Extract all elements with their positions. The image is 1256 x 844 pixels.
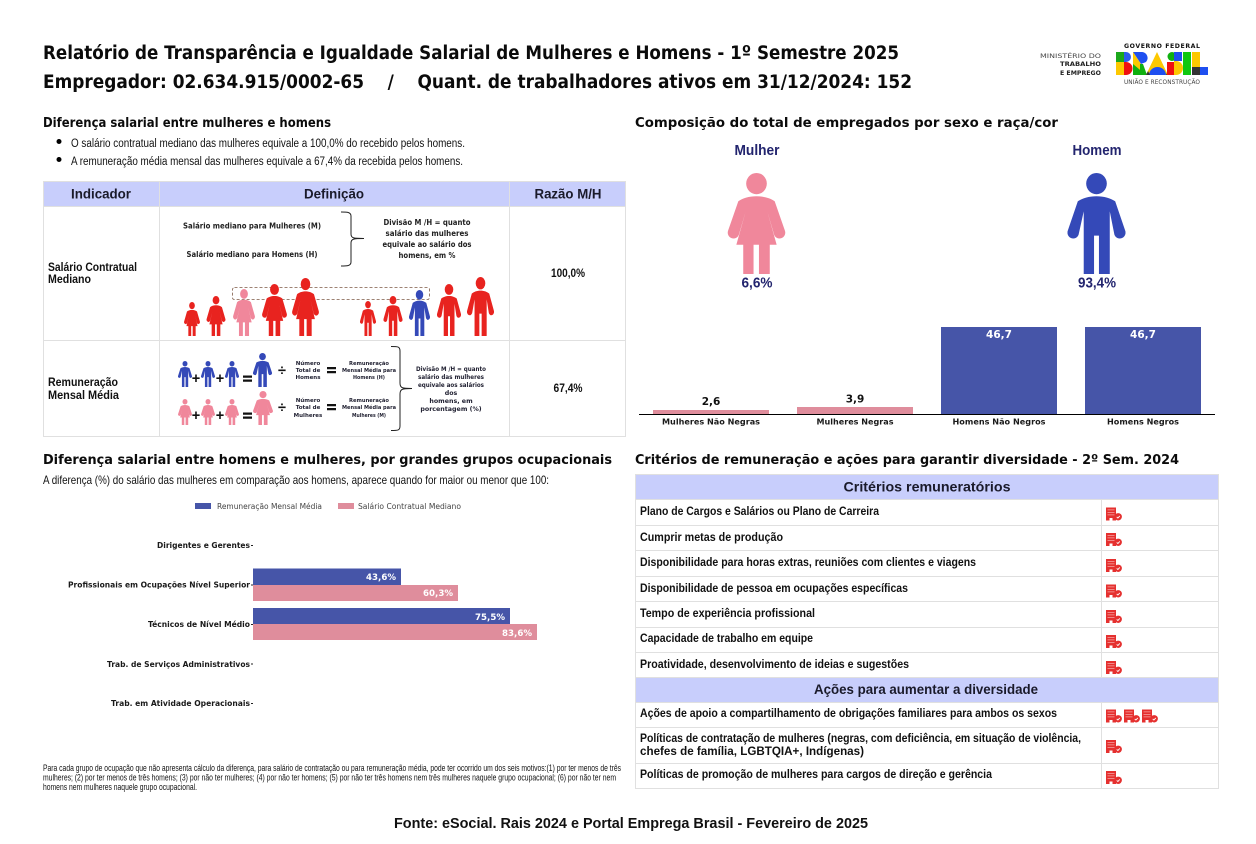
criteria table: Políticas de promoção de mulheres para cargos de direção e gerência — [640, 769, 993, 781]
criteria table: chefes de família, LGBTQIA+, Indígenas) — [640, 746, 864, 758]
criteria table: Capacidade de trabalho em equipe — [640, 633, 813, 645]
criteria table: Tempo de experiência profissional — [640, 608, 815, 620]
legend — [195, 501, 461, 511]
indicator table: Indicador — [71, 186, 132, 202]
criteria table: Critérios remuneratórios — [844, 480, 1010, 494]
icons: building with check marks — [1106, 508, 1158, 784]
panel: critérios de remuneração e ações — [635, 452, 1219, 789]
legend: Remuneração Mensal Média — [217, 501, 322, 511]
icons: men by salary order — [360, 277, 494, 336]
row: remuneração mensal média: Mensal Média para — [342, 404, 396, 411]
row: remuneração mensal média: Total de — [296, 368, 321, 374]
horizontal bar chart: 43,6% — [366, 573, 396, 583]
row: remuneração mensal média: porcentagem (%) — [420, 406, 482, 413]
bullet list — [56, 138, 465, 168]
row: remuneração mensal média: + — [216, 371, 224, 387]
bullet list: O salário contratual mediano das mulheres equivale a 100,0% do recebido pelos homens. — [71, 138, 465, 150]
label: homem: Homem — [1072, 142, 1122, 159]
row: remuneração mensal média: + — [216, 408, 224, 424]
row: remuneração mensal média: ÷ — [278, 400, 286, 416]
value: homens 93,4%: 93,4% — [1078, 274, 1116, 292]
heading: Composição do total de empregados por sexo e raça/cor — [635, 115, 1058, 131]
panel: diferença por grandes grupos ocupacionais — [43, 452, 621, 792]
footnote: homens nem mulheres naquele grupo ocupacional. — [43, 782, 197, 792]
row: salário contratual mediano: Mediano — [48, 274, 91, 286]
title: Relatório de Transparência e Igualdade Salarial de Mulheres e Homens - 1º Semestre 2025 — [43, 43, 899, 64]
row: remuneração mensal média: + — [192, 408, 200, 424]
row: remuneração mensal média: salário das mulheres — [418, 373, 484, 381]
row: remuneração mensal média: Número — [296, 397, 320, 404]
horizontal bar chart: Trab. de Serviços Administrativos — [107, 660, 250, 669]
row: remuneração mensal média: dos — [445, 390, 458, 397]
row: salário contratual mediano: homens, em % — [398, 251, 456, 260]
row: salário contratual mediano: equivale ao salário dos — [382, 240, 472, 249]
criteria table: Plano de Cargos e Salários ou Plano de Carreira — [640, 506, 880, 518]
criteria table: Ações para aumentar a diversidade — [814, 682, 1038, 697]
logo: ministério e governo federal: GOVERNO FEDERAL — [1124, 43, 1200, 50]
bullet list: A remuneração média mensal das mulheres equivale a 67,4% da recebida pelos homens. — [71, 156, 463, 168]
horizontal bar chart: Dirigentes e Gerentes — [157, 541, 250, 550]
criteria table: Cumprir metas de produção — [640, 532, 783, 544]
row: remuneração mensal média: Mensal Média — [48, 390, 120, 402]
indicator table — [43, 181, 626, 437]
row: remuneração mensal média: Divisão M /H = quanto — [416, 366, 487, 373]
row: remuneração mensal média: homens, em — [429, 398, 473, 405]
horizontal bar chart: 60,3% — [423, 589, 453, 599]
row: remuneração mensal média: Mulheres — [294, 413, 323, 419]
row: remuneração mensal média: Remuneração — [48, 377, 118, 389]
bar chart: sexo e raça/cor: Mulheres Não Negras — [662, 416, 760, 426]
subtitle: A diferença (%) do salário das mulheres em comparação aos homens, aparece quando for maior ou menor que 100: — [43, 473, 549, 487]
bar chart: sexo e raça/cor: 46,7 — [986, 329, 1012, 341]
footnote: mulheres; (2) por ter menos de três homens; (3) por não ter mulheres; (4) por não ter homens; (5) por não ter três homens nem três mulheres naquele grupo ocupacional; (6) por não ter nem — [43, 772, 616, 782]
icon: man — [1067, 173, 1126, 274]
bar chart: sexo e raça/cor: Homens Negros — [1107, 416, 1179, 426]
bar chart: sexo e raça/cor: Homens Não Negros — [952, 416, 1046, 426]
row: remuneração mensal média: 67,4% — [554, 383, 582, 395]
row: salário contratual mediano: Salário mediano para Homens (H) — [186, 250, 318, 259]
row: salário contratual mediano: salário das mulheres — [386, 229, 469, 238]
label: mulher: Mulher — [734, 142, 780, 159]
row: remuneração mensal média: equivale aos salários — [418, 381, 484, 389]
panel: diferença salarial entre mulheres e homens — [43, 115, 626, 437]
criteria table: Políticas de contratação de mulheres (negras, com deficiência, em situação de violência, — [640, 733, 1081, 745]
row: remuneração mensal média: Total de — [296, 405, 321, 411]
criteria table: Ações de apoio a compartilhamento de obrigações familiares para ambos os sexos — [640, 708, 1057, 720]
criteria table — [635, 474, 1219, 789]
heading: Critérios de remuneração e ações para garantir diversidade - 2º Sem. 2024 — [635, 452, 1179, 468]
criteria table: Disponibilidade de pessoa em ocupações específicas — [640, 583, 908, 595]
bar chart: sexo e raça/cor: 2,6 — [702, 396, 720, 408]
horizontal bar chart — [68, 541, 537, 708]
icons: women by salary order — [184, 278, 319, 336]
footnote — [43, 763, 621, 792]
row: salário contratual mediano: Salário Contratual — [48, 262, 137, 274]
bar chart: sexo e raça/cor: 3,9 — [846, 394, 864, 406]
heading: Diferença salarial entre mulheres e homens — [43, 115, 331, 131]
horizontal bar chart: Trab. em Atividade Operacionais — [111, 699, 250, 708]
heading: Diferença salarial entre homens e mulheres, por grandes grupos ocupacionais — [43, 452, 612, 468]
row: remuneração mensal média: ÷ — [278, 363, 286, 379]
row: remuneração mensal média: + — [192, 371, 200, 387]
logo: ministério e governo federal: MINISTÉRIO DO — [1040, 51, 1101, 60]
title — [43, 43, 912, 93]
row: remuneração mensal média: Mulheres (M) — [352, 413, 386, 419]
row: salário contratual mediano: 100,0% — [551, 268, 585, 280]
row: remuneração mensal média — [48, 346, 582, 430]
panel: composição por sexo e raça/cor — [635, 115, 1215, 426]
logo: ministério e governo federal — [1040, 43, 1208, 86]
indicator table: Definição — [304, 186, 364, 202]
row: remuneração mensal média: Remuneração — [349, 361, 389, 367]
bar chart: sexo e raça/cor: 46,7 — [1130, 329, 1156, 341]
criteria table: Disponibilidade para horas extras, reuniões com clientes e viagens — [640, 557, 976, 569]
icon: woman — [728, 173, 785, 274]
logo: ministério e governo federal: E EMPREGO — [1060, 70, 1101, 77]
row: remuneração mensal média: Homens (H) — [353, 375, 385, 381]
row: salário contratual mediano: Salário mediano para Mulheres (M) — [183, 222, 321, 230]
footnote: Para cada grupo de ocupação que não apresenta cálculo da diferença, para salário de contratação ou para remuneração média, pode ter ocorrido um dos seis motivos:(1) por ter menos de três — [43, 763, 621, 773]
horizontal bar chart: Técnicos de Nível Médio — [148, 620, 250, 629]
value: mulheres 6,6%: 6,6% — [742, 274, 772, 292]
row: remuneração mensal média: Mensal Média para — [342, 367, 396, 374]
row: remuneração mensal média: Número — [296, 360, 320, 367]
horizontal bar chart: Profissionais em Ocupações Nível Superior — [68, 580, 250, 590]
bar chart: sexo e raça/cor — [639, 327, 1215, 426]
title: Empregador: 02.634.915/0002-65 / Quant. de trabalhadores ativos em 31/12/2024: 152 — [43, 72, 912, 93]
row: salário contratual mediano: Divisão M /H = quanto — [384, 218, 470, 227]
row: remuneração mensal média: Remuneração — [349, 398, 389, 404]
horizontal bar chart: 75,5% — [475, 613, 505, 623]
source note: Fonte: eSocial. Rais 2024 e Portal Emprega Brasil - Fevereiro de 2025 — [394, 815, 868, 832]
criteria table: Proatividade, desenvolvimento de ideias e sugestões — [640, 659, 909, 671]
logo: ministério e governo federal: UNIÃO E RECONSTRUÇÃO — [1124, 79, 1200, 86]
indicator table: Razão M/H — [534, 186, 602, 202]
legend: Salário Contratual Mediano — [358, 502, 461, 511]
row: salário contratual mediano — [48, 212, 585, 336]
logo: ministério e governo federal: TRABALHO — [1060, 61, 1101, 68]
bar chart: sexo e raça/cor: Mulheres Negras — [816, 416, 894, 426]
horizontal bar chart: 83,6% — [502, 629, 532, 639]
row: remuneração mensal média: Homens — [295, 375, 321, 381]
